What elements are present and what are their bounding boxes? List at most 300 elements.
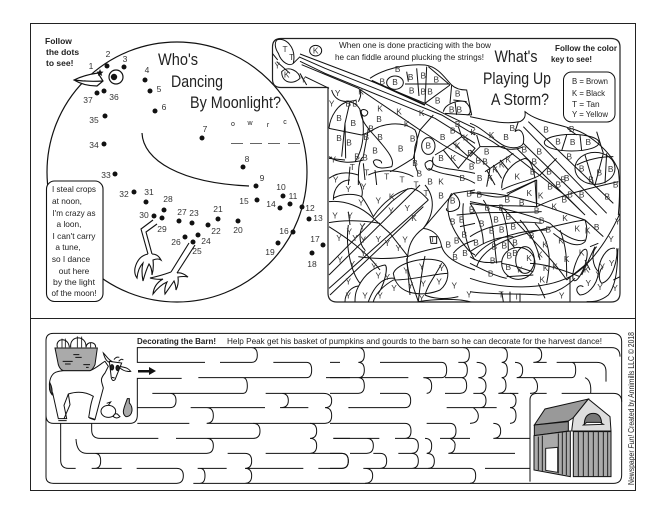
violin color letters: Y (376, 271, 382, 281)
violin color letters: B (446, 240, 452, 250)
dots and numbers: 33 (101, 170, 111, 180)
violin color letters: K (411, 213, 417, 223)
callout: poem (46, 181, 103, 302)
violin color letters: Y (377, 290, 383, 300)
violin color letters: Y (439, 263, 445, 273)
bird legs (135, 220, 195, 294)
violin color letters: B (434, 75, 440, 85)
dots and numbers: 17 (310, 234, 320, 244)
dots and numbers: 35 (89, 115, 99, 125)
violin color letters: B (594, 222, 600, 232)
violin color letters: B (352, 99, 358, 109)
violin color letters: B (579, 190, 585, 200)
dots and numbers: 19 (265, 247, 275, 257)
dots and numbers: 27 (177, 207, 187, 217)
bird beak and eye (74, 69, 123, 86)
violin color letters: B (346, 99, 352, 109)
violin color letters: B (450, 126, 456, 136)
violin color letters: Y (421, 279, 427, 289)
violin color letters: B (537, 146, 543, 156)
violin color letters: B (435, 96, 441, 106)
violin color letters: Y (396, 243, 402, 253)
violin color letters: B (395, 64, 401, 74)
violin color letters: B (556, 180, 562, 190)
violin color letters: B (512, 237, 518, 247)
violin color letters: B (564, 173, 570, 183)
violin color letters: B (503, 132, 509, 142)
dots and numbers: 22 (211, 226, 221, 236)
title: what's playing up a storm: What's (494, 47, 538, 66)
violin color letters: B (588, 175, 594, 185)
violin color letters: K (487, 173, 493, 183)
dots and numbers: 16 (279, 226, 289, 236)
dots and numbers: 20 (233, 225, 243, 235)
dots and numbers: 34 (89, 140, 99, 150)
violin color letters: B (409, 86, 415, 96)
violin line art (272, 39, 620, 303)
violin color letters: K (542, 240, 548, 250)
violin color letters: Y (347, 226, 353, 236)
violin color letters: B (579, 164, 585, 174)
violin color letters: B (459, 215, 465, 225)
dots and numbers: 13 (313, 213, 323, 223)
violin color letters: Y (586, 278, 592, 288)
violin color letters: B (511, 221, 517, 231)
violin color letters: B (597, 167, 603, 177)
dots and numbers: 8 (245, 154, 250, 164)
violin color letters: B (530, 166, 536, 176)
violin color letters: T (289, 52, 294, 62)
violin color letters: B (336, 133, 342, 143)
violin color letters: Y (331, 155, 337, 165)
violin color letters: Y (332, 211, 338, 221)
violin color letters: B (608, 164, 614, 174)
violin color letters: K (558, 236, 564, 246)
title: what's playing up a storm: Playing Up (483, 69, 551, 88)
answer blanks (231, 119, 300, 144)
dots and numbers: 15 (239, 196, 249, 206)
color key legend: K = Black (572, 88, 606, 98)
dots and numbers: 28 (163, 194, 173, 204)
violin color letters: B (555, 136, 561, 146)
violin color letters: Y (362, 290, 368, 300)
violin color letters: B (467, 148, 473, 158)
dots and numbers: 2 (106, 49, 111, 59)
violin color letters: Y (419, 293, 425, 303)
violin color letters: T (430, 234, 435, 244)
panel: moon dot-to-dot (45, 36, 307, 302)
violin color letters: B (452, 252, 458, 262)
violin color letters: B (410, 134, 416, 144)
violin color letters: Y (466, 290, 472, 300)
title: what's playing up a storm: A Storm? (491, 90, 549, 109)
violin color letters: B (561, 175, 567, 185)
violin color letters: B (492, 241, 498, 251)
violin color letters: K (540, 275, 546, 285)
dots and numbers: 9 (260, 173, 265, 183)
violin color letters: Y (347, 210, 353, 220)
violin color letters: B (519, 197, 525, 207)
violin color letters: Y (452, 281, 458, 291)
violin color letters: T (423, 188, 429, 198)
violin color letters: B (507, 251, 513, 261)
violin color letters: K (584, 265, 590, 275)
callout: poem: at noon, (52, 196, 82, 206)
violin color letters: B (351, 118, 357, 128)
violin color letters: Y (436, 276, 442, 286)
maze heading: Help Peak get his basket of pumpkins and gourds to the barn so he can decorate for the harvest dance! (227, 336, 602, 346)
violin color letters: B (499, 225, 505, 235)
violin color letters: K (489, 130, 495, 140)
violin color letters: B (562, 195, 568, 205)
violin color letters: Y (329, 99, 335, 109)
callout: poem: out here (59, 266, 90, 276)
violin color letters: K (358, 86, 364, 96)
violin color letters: Y (612, 283, 618, 293)
callout: poem: I'm crazy as (52, 208, 96, 218)
violin color letters: B (440, 132, 446, 142)
violin color letters: B (364, 132, 370, 142)
violin color letters: B (462, 230, 468, 240)
dots and numbers: 12 (305, 203, 315, 213)
violin color letters: B (380, 76, 386, 86)
violin color letters: Y (361, 181, 367, 191)
violin color letters: K (471, 127, 477, 137)
violin color letters: B (490, 255, 496, 265)
violin color letters: K (396, 106, 402, 116)
violin color letters: B (408, 72, 414, 82)
violin color letters: T (498, 290, 504, 300)
violin color letters: Y (403, 265, 409, 275)
violin color letters: B (477, 173, 483, 183)
violin color letters: Y (301, 75, 307, 85)
violin color letters: Y (376, 196, 382, 206)
callout: poem: I can't carry (52, 231, 96, 241)
violin color letters: K (438, 176, 444, 186)
answer blanks: c (283, 119, 287, 126)
violin color letters: K (564, 254, 570, 264)
violin color letters: B (469, 205, 475, 215)
dots and numbers: 18 (307, 259, 317, 269)
violin color letters: K (543, 263, 549, 273)
violin color letters: B (462, 248, 468, 258)
violin color letters: Y (346, 276, 352, 286)
violin color letters: B (613, 180, 619, 190)
violin color letters: B (510, 123, 516, 133)
violin color letters: Y (608, 234, 614, 244)
violin color letters: T (384, 171, 389, 181)
violin color letters: B (377, 132, 383, 142)
violin color letters: B (505, 195, 511, 205)
dots and numbers: 14 (266, 199, 276, 209)
text: violin caption: When one is done practicing with the bow (339, 40, 492, 50)
violin color letters: K (455, 140, 461, 150)
callout: poem: so I dance (52, 254, 91, 264)
violin color letters: B (455, 89, 461, 99)
moon circle (47, 42, 307, 302)
violin color letters: B (546, 166, 552, 176)
dots and numbers: 3 (123, 54, 128, 64)
violin color letters: B (488, 269, 494, 279)
violin color letters: K (284, 70, 290, 80)
violin color letters: B (567, 152, 573, 162)
violin color letters: Y (609, 258, 615, 268)
violin color letters: Y (600, 261, 606, 271)
violin color letters: Y (385, 272, 391, 282)
title: who's dancing by moonlight (158, 50, 281, 112)
violin color letters: Y (596, 270, 602, 280)
violin color letters: B (567, 190, 573, 200)
violin color letters: Y (405, 203, 411, 213)
color key legend: T = Tan (572, 99, 600, 109)
violin color letters: B (392, 77, 398, 87)
violin color letters: B (450, 216, 456, 226)
violin color letters: K (575, 224, 581, 234)
violin color letters: B (570, 137, 576, 147)
maze heading: Decorating the Barn! (137, 336, 216, 346)
violin color letters: B (485, 202, 491, 212)
violin color letters: B (532, 156, 538, 166)
violin color letters (275, 44, 621, 303)
violin color letters: K (538, 191, 544, 201)
dots and numbers: 21 (213, 204, 223, 214)
violin color letters: K (579, 247, 585, 257)
violin color letters: Y (358, 197, 364, 207)
violin color letters: B (506, 211, 512, 221)
violin color letters: Y (361, 235, 367, 245)
violin color letters: B (547, 181, 553, 191)
dots and numbers: 5 (157, 84, 162, 94)
violin color letters: K (526, 253, 532, 263)
violin color letters: B (569, 124, 575, 134)
answer blanks: w (246, 120, 253, 127)
violin color letters: B (534, 206, 540, 216)
violin color letters: Y (350, 259, 356, 269)
barn (534, 399, 611, 477)
violin color letters: K (562, 213, 568, 223)
violin color letters: B (512, 248, 518, 258)
violin color letters: Y (385, 238, 391, 248)
violin color letters: K (515, 171, 521, 181)
violin color letters: B (479, 219, 485, 229)
violin color letters: B (476, 155, 482, 165)
violin color letters: T (364, 167, 369, 177)
violin color letters: B (438, 153, 444, 163)
violin color letters: T (350, 162, 355, 172)
instruction: follow the dots: the dots (46, 47, 79, 57)
title: what's playing up a storm (483, 47, 551, 109)
violin color letters: B (346, 137, 352, 147)
violin color letters: B (460, 173, 466, 183)
violin color letters: K (389, 191, 395, 201)
violin color letters: Y (391, 283, 397, 293)
violin color letters: K (552, 201, 558, 211)
violin color letters: B (417, 169, 423, 179)
violin color letters: Y (360, 221, 366, 231)
violin color letters: B (502, 240, 508, 250)
violin color letters: K (537, 250, 543, 260)
violin color letters: K (506, 155, 512, 165)
violin color letters: B (449, 105, 455, 115)
dots and numbers: 4 (145, 65, 150, 75)
violin color letters: K (517, 265, 523, 275)
violin color letters: Y (346, 184, 352, 194)
violin color letters: B (455, 119, 461, 129)
violin color letters: Y (346, 291, 352, 301)
violin color letters: B (522, 145, 528, 155)
dots and numbers: 31 (144, 187, 154, 197)
violin color letters: B (546, 225, 552, 235)
violin color letters: B (421, 71, 427, 81)
violin color letters: T (399, 175, 405, 185)
dots and numbers: 6 (162, 102, 167, 112)
violin color letters: B (454, 235, 460, 245)
violin color letters: B (499, 202, 505, 212)
violin color letters: Y (371, 261, 377, 271)
violin color letters: B (539, 215, 545, 225)
violin color letters: Y (275, 61, 281, 71)
violin color letters: K (463, 132, 469, 142)
violin color letters: B (438, 190, 444, 200)
color key legend: Y = Yellow (572, 109, 609, 119)
color key legend: B = Brown (572, 76, 608, 86)
violin color letters: Y (337, 255, 343, 265)
text: violin caption: he can fiddle around plucking the strings! (335, 52, 484, 62)
violin color letters: Y (376, 234, 382, 244)
instruction: follow the dots (45, 36, 79, 68)
violin color letters: K (404, 119, 410, 129)
violin color letters: K (451, 153, 457, 163)
violin color letters: K (419, 108, 425, 118)
violin color letters: Y (402, 235, 408, 245)
violin color letters: B (586, 137, 592, 147)
violin color letters: K (377, 103, 383, 113)
violin color letters: B (427, 176, 433, 186)
violin color letters: Y (336, 233, 342, 243)
violin color letters: K (492, 165, 498, 175)
violin color letters: Y (419, 261, 425, 271)
maze walls right (330, 333, 622, 483)
instruction: follow the color key (551, 43, 618, 64)
dots and numbers: 32 (119, 189, 129, 199)
violin color letters: K (527, 188, 533, 198)
violin color letters: B (426, 140, 432, 150)
violin color letters: B (473, 237, 479, 247)
panel: violin color by letter (272, 38, 621, 303)
callout: poem: I steal crops (52, 184, 96, 194)
dots and numbers: 37 (83, 95, 93, 105)
violin color letters: T (413, 180, 419, 190)
violin color letters: B (493, 215, 499, 225)
violin color letters: Y (559, 290, 565, 300)
dots and numbers: 1 (89, 61, 94, 71)
dots and numbers: 23 (189, 208, 199, 218)
violin color letters: T (514, 291, 519, 301)
dots and numbers: 25 (192, 246, 202, 256)
answer blanks: r (267, 122, 270, 129)
violin color letters: B (484, 146, 490, 156)
text: violin caption (335, 40, 492, 62)
violin color letters: K (552, 261, 558, 271)
violin color letters: K (499, 160, 505, 170)
dots and numbers: 7 (203, 124, 208, 134)
dots and numbers: 36 (109, 92, 119, 102)
start arrow (138, 367, 156, 375)
violin color letters: B (412, 158, 418, 168)
color key legend (564, 72, 615, 122)
dots and numbers (83, 49, 326, 269)
violin color letters: Y (352, 233, 358, 243)
answer blanks: o (231, 121, 235, 128)
violin color letters: B (457, 105, 463, 115)
violin color letters: Y (597, 282, 603, 292)
violin color letters: K (313, 45, 319, 55)
panel: maze (46, 333, 622, 483)
violin color letters: B (354, 151, 360, 161)
goat with basket (49, 336, 132, 421)
violin color letters: B (398, 144, 404, 154)
violin color letters: Y (408, 280, 414, 290)
violin color letters: B (427, 87, 433, 97)
dots and numbers: 26 (171, 237, 181, 247)
bird wing (142, 133, 249, 186)
violin color letters: Y (333, 175, 339, 185)
instruction: follow the color key: Follow the color (555, 43, 618, 53)
title: who's dancing by moonlight: Dancing (171, 72, 223, 91)
violin color letters: B (466, 189, 472, 199)
violin color letters: Y (388, 206, 394, 216)
violin color letters: B (372, 146, 378, 156)
dots and numbers: 11 (289, 191, 298, 201)
violin color letters: B (605, 191, 611, 201)
violin color letters: B (450, 196, 456, 206)
violin color letters: B (482, 156, 488, 166)
title: who's dancing by moonlight: Who's (158, 50, 198, 69)
callout: poem: a loon, (57, 219, 81, 229)
violin color letters: Y (361, 248, 367, 258)
violin color letters: B (362, 152, 368, 162)
violin color letters: B (489, 226, 495, 236)
instruction: follow the dots: Follow (45, 36, 72, 46)
basket of pumpkins (55, 336, 97, 371)
violin color letters: B (506, 262, 512, 272)
violin color letters: B (529, 231, 535, 241)
violin color letters: B (477, 190, 483, 200)
violin color letters: B (421, 87, 427, 97)
dots and numbers: 10 (276, 182, 286, 192)
goat body (49, 353, 132, 421)
maze walls left (46, 333, 350, 483)
violin color letters: B (543, 125, 549, 135)
dots and numbers: 24 (201, 236, 211, 246)
dots and numbers: 29 (157, 224, 167, 234)
violin color letters: B (469, 161, 475, 171)
callout: poem: by the light (53, 277, 96, 287)
callout: poem: a tune, (55, 242, 81, 252)
violin color letters: B (336, 113, 342, 123)
credit line: Newspaper Fun! Created by Annimills LLC © 2018 (627, 332, 636, 485)
dots and numbers: 30 (139, 210, 149, 220)
violin color letters: Y (615, 216, 621, 226)
instruction: follow the color key: key to see! (551, 54, 592, 64)
violin color letters: K (585, 226, 591, 236)
violin color letters: B (368, 123, 374, 133)
title: who's dancing by moonlight: By Moonlight? (190, 93, 281, 112)
callout: poem: of the moon! (52, 288, 96, 298)
violin color letters: Y (335, 88, 341, 98)
violin color letters: T (282, 44, 288, 54)
violin color letters: B (376, 114, 382, 124)
